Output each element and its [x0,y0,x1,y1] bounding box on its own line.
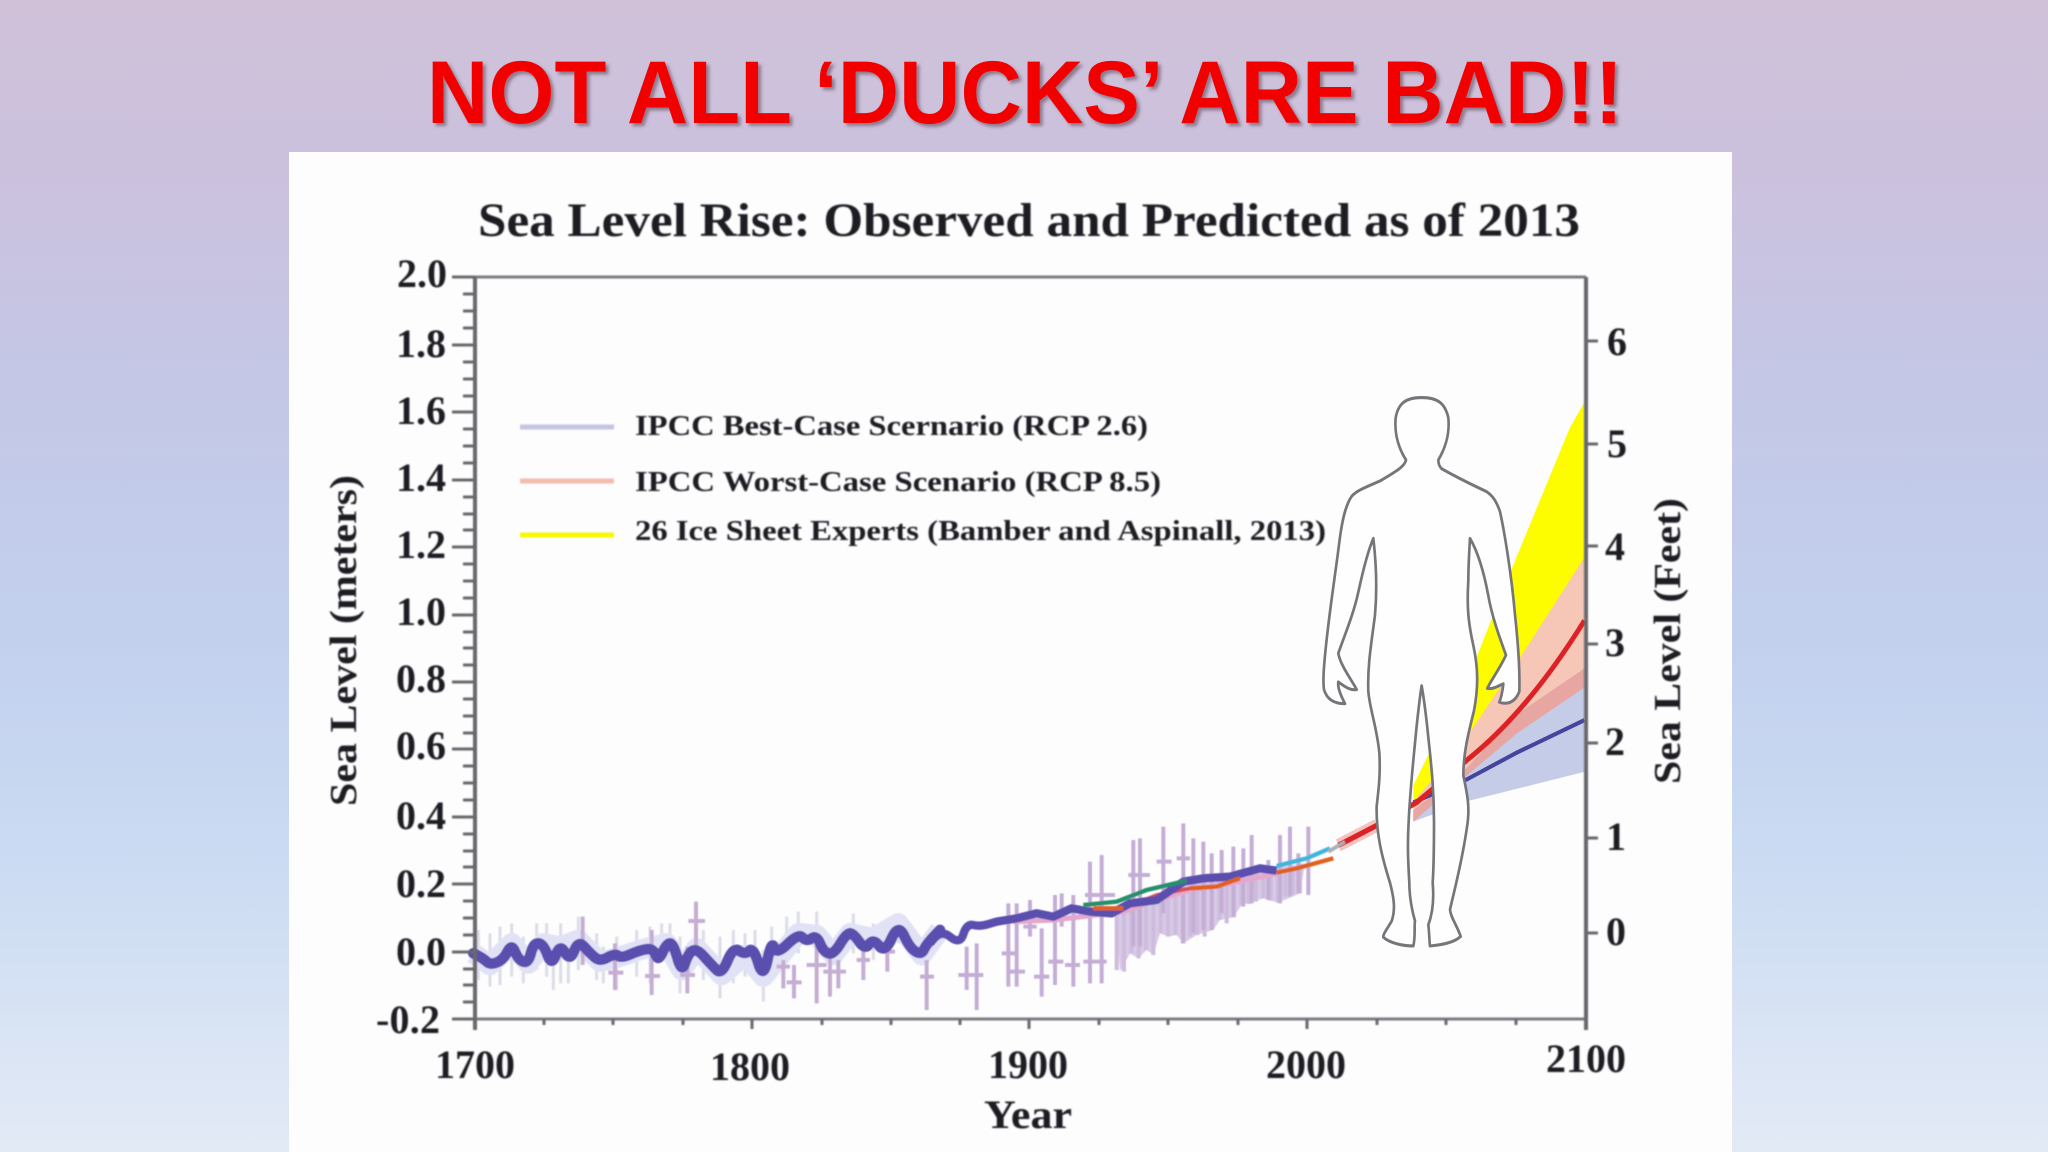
left axis labels [376,251,447,1042]
x axis labels: 2000 [1266,1042,1346,1087]
satellite series: cyan [1277,848,1330,866]
error bars [958,823,1308,1010]
legend: best case: IPCC Best-Case Scernario (RCP 2.6) [635,410,1148,442]
band: overlap of ranges [1413,669,1584,822]
chart axes [452,277,1598,1030]
satellite series: grey [1328,842,1345,852]
x axis labels [435,1036,1626,1089]
title: NOT ALL ‘DUCKS’ ARE BAD!! [427,42,1623,142]
mean line [930,868,1277,943]
left axis line [473,277,477,1030]
right axis labels [1605,319,1627,954]
projection bands [1338,403,1584,845]
pink series under mean [1013,873,1277,922]
human figure silhouette [1323,398,1519,946]
observed record: recent [930,823,1345,1010]
legend: ice sheet experts: 26 Ice Sheet Experts (Bamber and Aspinall, 2013) [635,515,1326,547]
satellite series: red [1123,888,1190,908]
left axis labels: 0.0 [396,929,446,974]
left axis labels: 1.6 [396,388,446,433]
right axis labels: 1 [1606,814,1626,859]
band: best-case range (blue) [1413,669,1584,822]
tide-gauge bars [1117,863,1300,972]
halo: near-term projection [1338,825,1377,845]
left axis labels: 1.2 [396,522,446,567]
band: worst-case range (pink) [1413,558,1584,822]
left axis labels: 1.4 [396,455,446,500]
x axis labels: 1900 [988,1042,1068,1087]
left minor ticks [463,294,475,1002]
left axis labels: 0.4 [396,793,446,838]
left axis labels: -0.2 [376,997,440,1042]
bottom ticks [544,1019,1516,1029]
line: worst-case mean [1338,621,1584,845]
observed record: early [473,902,940,1010]
legend [520,410,1326,547]
chart heading: Sea Level Rise: Observed and Predicted as of 2013 [478,194,1580,247]
right axis title: Sea Level (Feet) [1647,498,1689,784]
right axis labels: 3 [1605,620,1625,665]
panel: chart background [289,152,1732,1152]
x axis title: Year [984,1092,1072,1137]
x axis labels: 1800 [710,1044,790,1089]
right axis line [1584,277,1588,1030]
right axis labels: 0 [1606,909,1626,954]
error bars [583,902,934,1010]
line: best-case mean [1413,720,1584,802]
left axis labels: 2.0 [397,251,447,296]
mean line [473,930,940,971]
left axis title: Sea Level (meters) [323,475,365,806]
left axis labels: 1.0 [396,589,446,634]
x axis labels: 1700 [435,1042,515,1087]
right axis labels: 4 [1605,524,1625,569]
left axis labels: 1.8 [396,321,446,366]
plot frame [475,277,1586,1019]
legend: worst case: IPCC Worst-Case Scenario (RCP 8.5) [635,466,1161,498]
tide-gauge cloud [1115,863,1305,972]
right axis labels: 6 [1607,319,1627,364]
left axis labels: 0.8 [396,656,446,701]
satellite series: green [1083,881,1187,905]
left axis labels: 0.2 [396,861,446,906]
band: ice sheet experts (yellow) [1413,403,1584,810]
right ticks [1586,341,1598,933]
right axis labels: 2 [1605,719,1625,764]
uncertainty band [473,923,940,977]
satellite series: orange [1093,858,1333,908]
right axis labels: 5 [1607,421,1627,466]
uncertainty spikes [478,912,898,1002]
x axis labels: 2100 [1546,1036,1626,1081]
left major ticks [452,277,475,1019]
left axis labels: 0.6 [396,723,446,768]
